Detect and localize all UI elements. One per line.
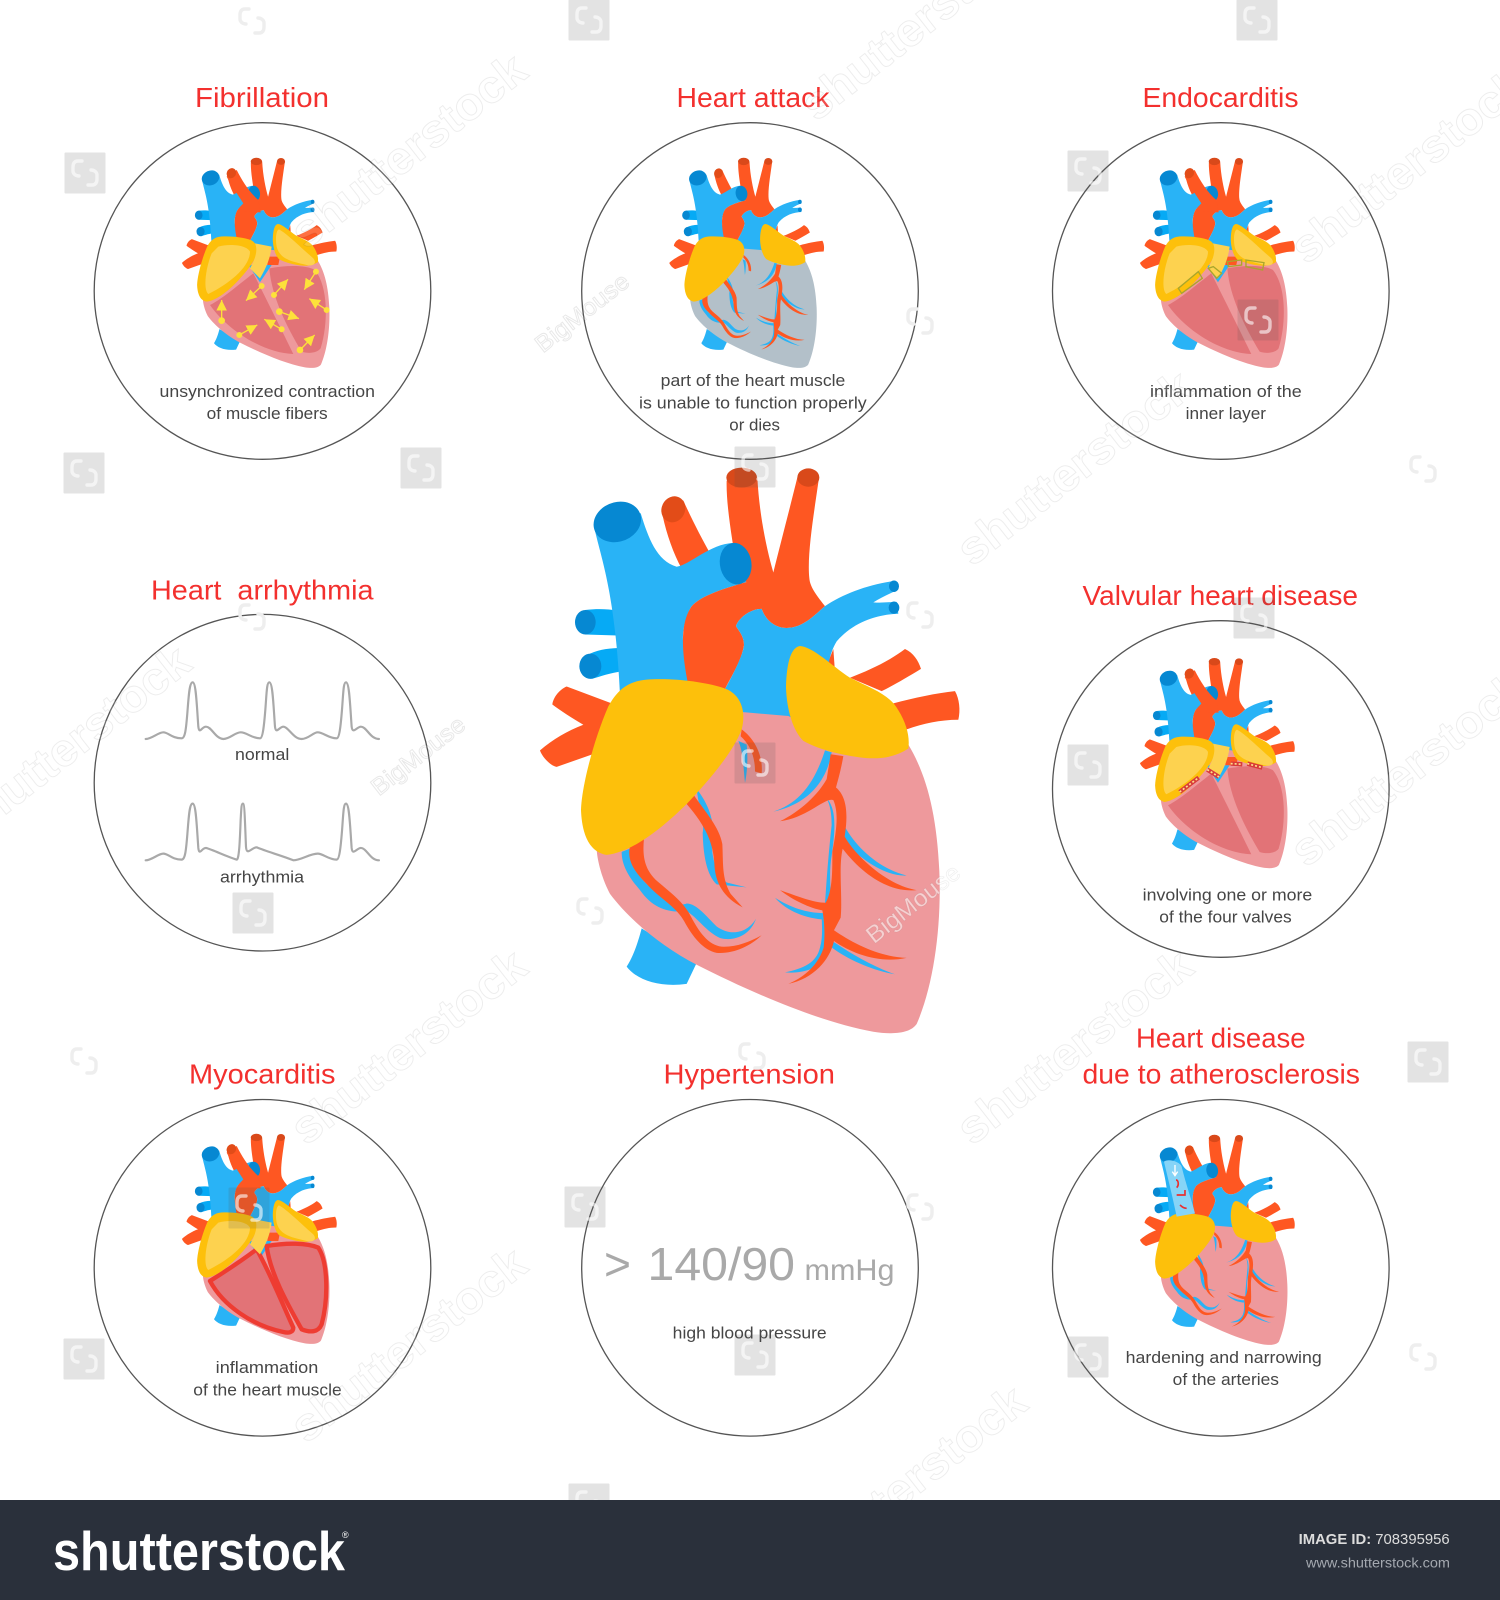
image id: IMAGE ID: 708395956 xyxy=(1299,1531,1450,1548)
blood pressure value: 140/90 xyxy=(648,1238,795,1290)
caption: unsynchronized contraction xyxy=(160,382,375,401)
icon: heart with diseased valves xyxy=(1140,658,1295,868)
watermarks: shutterstock xyxy=(780,1374,1036,1590)
icon: heart with grey dead muscle xyxy=(669,158,824,368)
caption: inflammation of the xyxy=(1150,382,1302,401)
caption line 2: inner layer xyxy=(1186,404,1266,423)
panel: Myocarditis xyxy=(94,1058,431,1436)
caption line 2: of the heart muscle xyxy=(193,1381,342,1400)
caption line 2: is unable to function properly xyxy=(639,393,867,412)
label: arrhythmia: arrhythmia xyxy=(220,868,305,887)
circle outline xyxy=(1052,123,1389,459)
icon: heart with inflamed inner layer xyxy=(1140,158,1295,368)
icon: heart with narrowed artery xyxy=(1140,1135,1295,1345)
circle outline xyxy=(94,1100,431,1436)
watermarks: BigMouse xyxy=(861,859,966,949)
heading: Fibrillation: Fibrillation xyxy=(195,82,329,113)
caption line 2: of the arteries xyxy=(1173,1370,1279,1389)
heading: Heart arrhythmia: Heart arrhythmia xyxy=(151,574,374,605)
watermarks: shutterstock xyxy=(280,42,536,258)
watermarks: shutterstock xyxy=(280,1236,536,1452)
heading: Valvular heart disease: Valvular heart disease xyxy=(1082,580,1358,611)
heading: Heart attack: Heart attack xyxy=(676,82,831,113)
website: www.shutterstock.com xyxy=(1305,1555,1450,1571)
chart: arrhythmia ECG trace xyxy=(146,804,379,860)
label: normal: normal xyxy=(235,745,289,764)
circle outline xyxy=(1052,621,1389,957)
caption line 2: of the four valves xyxy=(1159,908,1292,927)
caption: high blood pressure xyxy=(673,1323,827,1342)
caption: inflammation xyxy=(216,1358,318,1377)
heading: Myocarditis: Myocarditis xyxy=(189,1058,336,1089)
heading: Endocarditis: Endocarditis xyxy=(1142,82,1298,113)
watermarks: BigMouse xyxy=(530,268,635,358)
caption line 3: or dies xyxy=(729,416,780,435)
panel: Endocarditis xyxy=(1052,82,1389,459)
chart: normal ECG trace xyxy=(146,682,379,739)
watermarks: shutterstock xyxy=(946,938,1202,1154)
caption line 2: of muscle fibers xyxy=(207,404,328,423)
heading: Hypertension: Hypertension xyxy=(664,1058,835,1089)
footer bar xyxy=(0,1500,1500,1600)
watermarks: shutterstock xyxy=(946,359,1202,575)
panel: Hypertension xyxy=(582,1058,918,1436)
logo: shutterstock xyxy=(53,1520,345,1582)
circle outline xyxy=(1052,1100,1389,1436)
icon: heart with chaotic impulses xyxy=(182,158,337,368)
caption: involving one or more xyxy=(1143,886,1312,905)
circle outline xyxy=(582,123,918,459)
panel: Heart disease due to atherosclerosis xyxy=(1052,1022,1389,1436)
watermarks: shutterstock xyxy=(280,938,536,1154)
registered mark: ® xyxy=(342,1530,349,1540)
watermarks: BigMouse xyxy=(366,711,471,801)
heading line 1: Heart disease xyxy=(1136,1022,1306,1053)
heading line 2: due to atherosclerosis xyxy=(1082,1059,1360,1090)
caption: part of the heart muscle xyxy=(661,371,845,390)
blood pressure value xyxy=(604,1238,894,1290)
circle outline xyxy=(94,123,431,459)
caption: hardening and narrowing xyxy=(1126,1348,1322,1367)
circle outline xyxy=(582,1100,918,1436)
panel: Heart attack xyxy=(582,82,918,459)
panel: Valvular heart disease xyxy=(1052,580,1389,957)
panel: Fibrillation xyxy=(94,82,431,459)
icon: heart with inflamed muscle xyxy=(182,1134,337,1344)
blood pressure value: > xyxy=(604,1238,631,1290)
blood pressure value: mmHg xyxy=(804,1254,894,1287)
circle outline xyxy=(94,614,431,951)
main heart illustration xyxy=(540,468,959,1033)
panel: Heart arrhythmia xyxy=(94,574,431,951)
